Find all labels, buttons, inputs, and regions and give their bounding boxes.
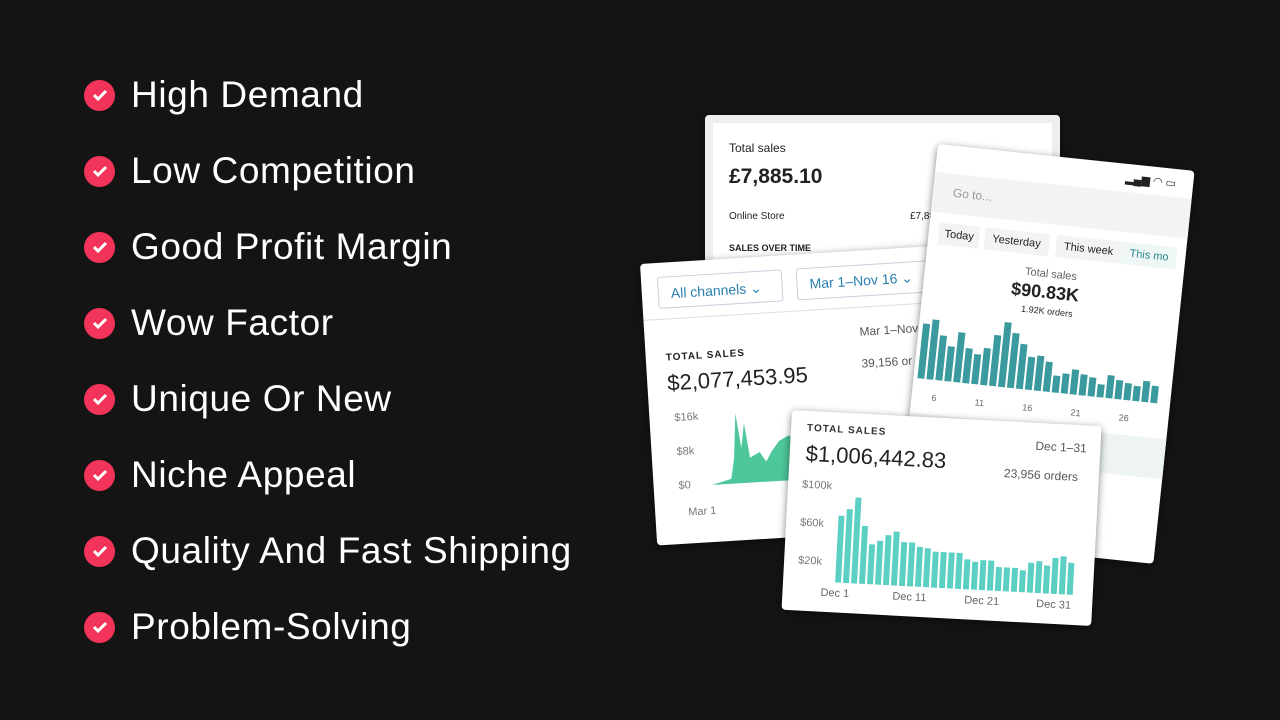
card: all channels chart: $16k	[674, 411, 699, 424]
card: all channels chart: $8k	[676, 445, 695, 458]
card: December sales chart: TOTAL SALES	[807, 423, 887, 438]
card: mobile phone chart: Today	[944, 228, 974, 243]
item: High Demand: High Demand	[131, 74, 364, 115]
card: December sales chart: Dec 11	[892, 591, 927, 604]
card: all channels chart: $0	[678, 479, 691, 492]
card: December sales chart: $20k	[798, 555, 822, 568]
card: all channels chart	[640, 246, 957, 545]
item: Quality And Fast Shipping: Quality And Fast Shipping	[131, 530, 572, 571]
item: Problem-Solving: Problem-Solving	[131, 606, 411, 647]
card: mobile phone chart: This week	[1063, 241, 1114, 258]
card: all channels chart: TOTAL SALES	[665, 348, 745, 364]
card: December sales chart	[782, 410, 1102, 626]
card: December sales chart: Dec 1	[820, 587, 849, 600]
card: total sales GBP: Online Store	[729, 211, 785, 222]
item: Niche Appeal: Niche Appeal	[131, 454, 356, 495]
card: total sales GBP: £7,885	[910, 211, 941, 222]
card: mobile phone chart: This mo	[1129, 248, 1169, 264]
card: mobile phone chart: 6 11 16 21 26	[931, 393, 1129, 423]
card: mobile phone chart: ▂▄▆ ◠ ▭	[1125, 173, 1177, 190]
card: mobile phone chart: Yesterday	[992, 233, 1041, 250]
card: all channels chart: Mar 1–Nov	[859, 321, 919, 339]
card: mobile phone chart: Go to...	[952, 186, 993, 204]
card: all channels chart: All channels ⌄	[670, 280, 762, 301]
card: all channels chart: Mar 1–Nov 16 ⌄	[809, 269, 913, 292]
card: total sales GBP: SALES OVER TIME	[729, 243, 811, 253]
item: Low Competition: Low Competition	[131, 150, 416, 191]
card: total sales GBP	[705, 115, 1060, 275]
card: all channels chart: Mar 1	[688, 505, 717, 519]
card: all channels chart: 39,156 or	[861, 354, 913, 371]
checklist	[84, 74, 572, 647]
card: December sales chart: Dec 1–31	[1035, 439, 1087, 455]
card: total sales GBP: Total sales	[729, 141, 786, 155]
item: Good Profit Margin: Good Profit Margin	[131, 226, 452, 267]
item: Wow Factor: Wow Factor	[131, 302, 334, 343]
card: December sales chart: $1,006,442.83	[805, 441, 947, 473]
card: all channels chart: $2,077,453.95	[667, 362, 809, 396]
card: total sales GBP: £7,885.10	[729, 165, 822, 188]
item: Unique Or New: Unique Or New	[131, 378, 392, 419]
card: December sales chart: 23,956 orders	[1004, 466, 1078, 484]
card: December sales chart: Dec 31	[1036, 598, 1071, 612]
card: mobile phone chart: Total sales	[1024, 266, 1077, 283]
collage of sales screenshots	[640, 115, 1194, 626]
card: mobile phone chart: 1.92K orders	[1021, 304, 1073, 319]
card: mobile phone chart: $90.83K	[1010, 279, 1080, 306]
card: December sales chart: $100k	[802, 479, 832, 492]
card: December sales chart: Dec 21	[964, 594, 999, 608]
card: mobile phone chart	[897, 144, 1195, 564]
card: December sales chart: $60k	[800, 517, 824, 530]
